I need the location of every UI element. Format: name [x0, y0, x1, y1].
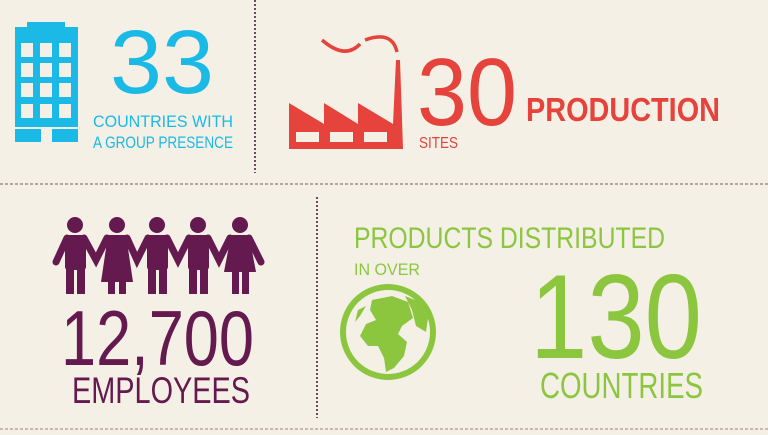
panel: production sites [289, 37, 720, 152]
stat: 130: 130 [530, 250, 702, 384]
label: countries: COUNTRIES [540, 365, 703, 406]
icon: globe [343, 287, 433, 377]
label: countries with a group presence: COUNTRIES WITH [93, 112, 233, 131]
label: countries with a group presence: A GROUP PRESENCE [93, 133, 233, 152]
panel: countries presence [15, 13, 233, 152]
heading: products distributed: PRODUCTS DISTRIBUTED [354, 222, 665, 255]
icon: factory [289, 37, 403, 149]
label: sites: SITES [419, 135, 458, 152]
label: production: PRODUCTION [526, 91, 720, 128]
stat: 33: 33 [110, 13, 214, 113]
panel: employees [56, 217, 261, 411]
stat: 30: 30 [417, 39, 517, 146]
stat: 12,700: 12,700 [61, 294, 254, 382]
panel: products distributed [343, 222, 703, 406]
label: employees: EMPLOYEES [72, 370, 250, 411]
label: in over: IN OVER [354, 260, 420, 279]
icon: people holding hands [56, 217, 261, 294]
icon: building [15, 22, 78, 142]
